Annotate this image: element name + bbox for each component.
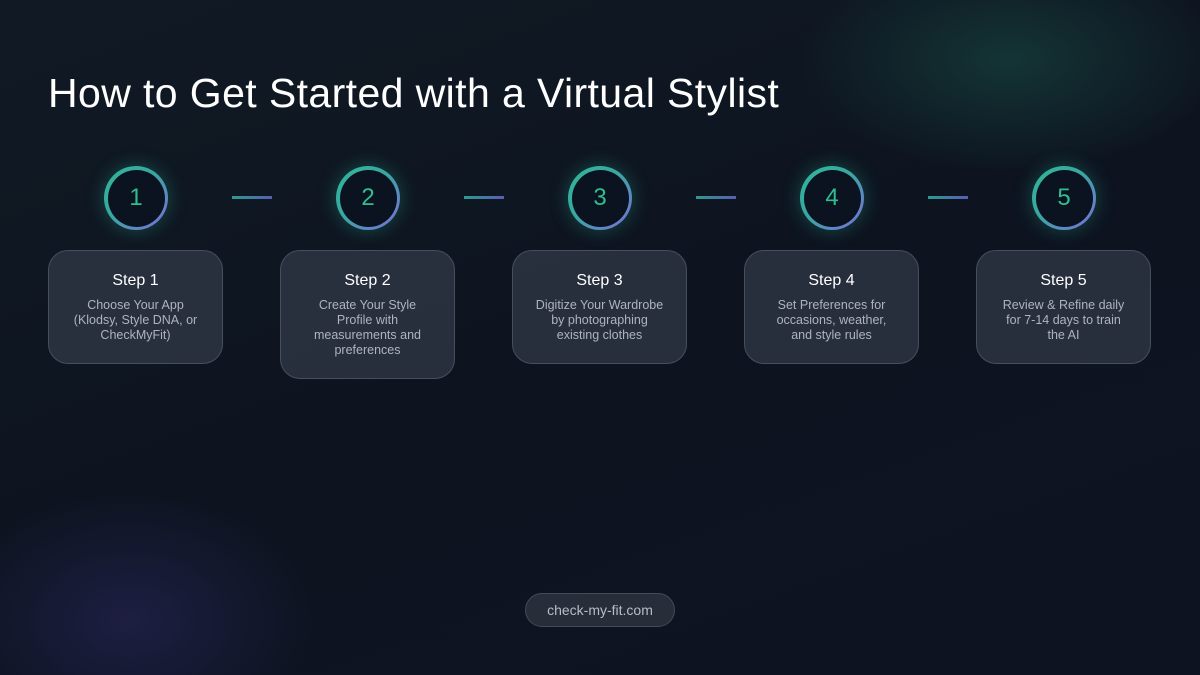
panel: step 2: preferences xyxy=(334,343,400,357)
circle 3 xyxy=(568,166,632,230)
circle 4: 4 xyxy=(825,184,839,211)
panel: step 5: Step 5 xyxy=(1040,272,1087,289)
circle 1 xyxy=(104,166,168,230)
panel: step 4: and style rules xyxy=(791,328,872,342)
circle 4 xyxy=(800,166,864,230)
footer url pill xyxy=(525,593,675,627)
panel: step 3 xyxy=(512,250,687,364)
panel: step 5 xyxy=(976,250,1151,364)
panel: step 4: occasions, weather, xyxy=(777,313,886,327)
circle 3: 3 xyxy=(593,184,607,211)
panel: step 1: Step 1 xyxy=(112,272,159,289)
footer url pill: check-my-fit.com xyxy=(547,602,653,618)
panel: step 2: measurements and xyxy=(314,328,421,342)
panel: step 3: existing clothes xyxy=(557,328,642,342)
panel: step 1: Choose Your App xyxy=(87,298,184,312)
panel: step 3: Step 3 xyxy=(576,272,623,289)
arrow: connector 3-4 xyxy=(696,196,736,199)
panel: step 1 xyxy=(48,250,223,364)
arrow: connector 1-2 xyxy=(232,196,272,199)
panel: step 3: by photographing xyxy=(551,313,648,327)
panel: step 3: Digitize Your Wardrobe xyxy=(536,298,663,312)
circle 2: 2 xyxy=(361,184,375,211)
panel: step 2: Step 2 xyxy=(344,272,391,289)
arrow: connector 2-3 xyxy=(464,196,504,199)
circle 1: 1 xyxy=(129,184,143,211)
panel: step 1: (Klodsy, Style DNA, or xyxy=(74,313,197,327)
circle 5: 5 xyxy=(1057,184,1071,211)
circle 2 xyxy=(336,166,400,230)
panel: step 2 xyxy=(280,250,455,379)
panel: step 5: Review & Refine daily xyxy=(1003,298,1124,312)
panel: step 4: Step 4 xyxy=(808,272,855,289)
title: How to Get Started with a Virtual Stylist xyxy=(48,70,779,116)
arrow: connector 4-5 xyxy=(928,196,968,199)
panel: step 2: Create Your Style xyxy=(319,298,416,312)
panel: step 5: the AI xyxy=(1048,328,1079,342)
panel: step 4 xyxy=(744,250,919,364)
panel: step 5: for 7-14 days to train xyxy=(1006,313,1121,327)
panel: step 1: CheckMyFit) xyxy=(100,328,171,342)
panel: step 2: Profile with xyxy=(337,313,398,327)
panel: step 4: Set Preferences for xyxy=(778,298,885,312)
circle 5 xyxy=(1032,166,1096,230)
